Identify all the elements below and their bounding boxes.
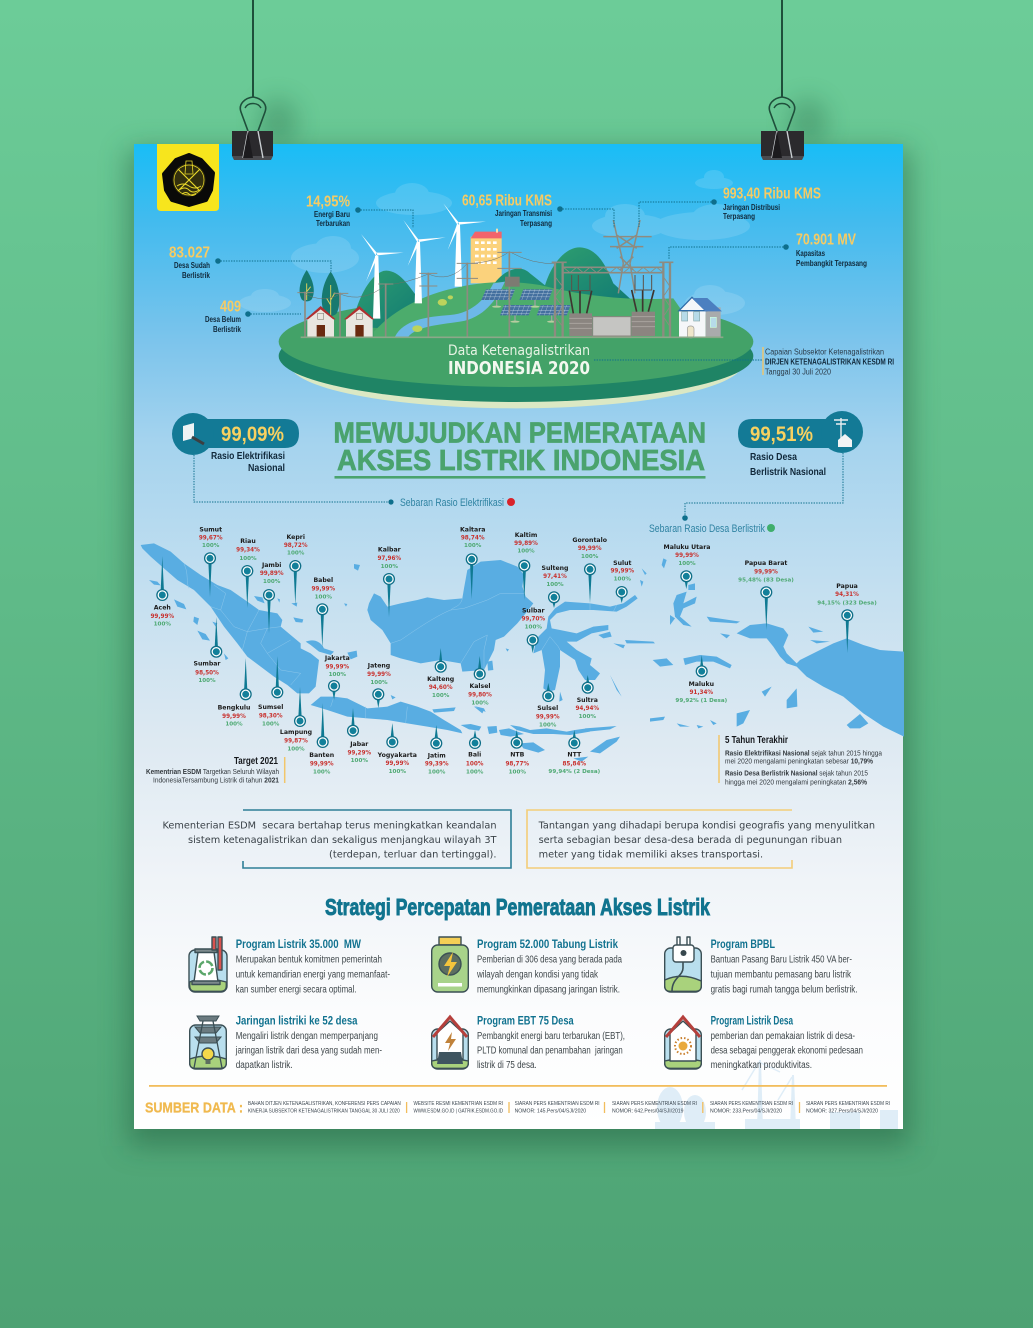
pin: Aceh: Aceh bbox=[154, 604, 171, 612]
footer: sumber data: KINERJA SUBSEKTOR KETENAGALISTRIKAN TANGGAL 30 JULI 2020 bbox=[248, 1109, 400, 1115]
Java and Madura bbox=[311, 697, 462, 733]
pin: Sumbar: 98,50% bbox=[195, 670, 219, 676]
callout: Jaringan Distribusi bbox=[639, 186, 821, 227]
solar panels bbox=[481, 289, 571, 323]
pin: Sultra bbox=[575, 675, 599, 720]
pin: Kalteng: 100% bbox=[432, 693, 450, 699]
pin: Gorontalo: 100% bbox=[581, 554, 599, 560]
pin: Kaltara: 98,74% bbox=[461, 536, 485, 542]
pin: Banten: Banten bbox=[309, 752, 334, 759]
callout: Jaringan Transmisi: 60,65 Ribu KMS bbox=[462, 192, 552, 210]
program: BPBL: Program BPBL bbox=[711, 937, 775, 951]
main title: AKSES LISTRIK INDONESIA bbox=[337, 445, 705, 477]
program: 52.000 Tabung Listrik: Program 52.000 Tabung Listrik bbox=[477, 937, 618, 951]
pin: Sumut bbox=[199, 526, 223, 597]
pin: Kaltim: Kaltim bbox=[515, 532, 537, 539]
pin: Kalsel bbox=[468, 656, 492, 706]
main title: MEWUJUDKAN PEMERATAAN bbox=[334, 418, 706, 450]
note: 5 Tahun Terakhir: Rasio Elektrifikasi Nasional sejak tahun 2015 hingga bbox=[725, 750, 882, 758]
text box: upaya Kementerian ESDM: Kementerian ESDM secara bertahap terus meningkatkan keandalan bbox=[162, 820, 496, 832]
pin: Sulteng bbox=[542, 565, 568, 608]
poster shadow bbox=[128, 150, 910, 1146]
pin: Lampung: Lampung bbox=[280, 729, 312, 736]
pin: Sumbar: 100% bbox=[198, 678, 216, 684]
binder clip left bbox=[232, 97, 273, 160]
footer: sumber data: WWW.ESDM.GO.ID | GATRIK.ESDM.GO.ID bbox=[414, 1109, 503, 1115]
pin: Bengkulu: Bengkulu bbox=[218, 704, 250, 712]
pin: Babel: 99,99% bbox=[311, 587, 335, 593]
footer: sumber data: SIARAN PERS KEMENTRIAN ESDM RI bbox=[515, 1101, 600, 1107]
pin: Sulbar: 100% bbox=[525, 625, 542, 631]
shrubs bbox=[412, 295, 453, 332]
pin: Jambi bbox=[260, 562, 284, 633]
callout: Desa Belum Berlistrik: Berlistrik bbox=[213, 324, 241, 334]
pin: Yogyakarta bbox=[377, 723, 417, 775]
pin: Lampung: 100% bbox=[287, 746, 305, 752]
pin: Jabar bbox=[347, 708, 371, 764]
callout: Kapasitas Pembangkit: 70.901 MV bbox=[796, 232, 856, 248]
icon: house with sun bbox=[665, 1017, 701, 1069]
callout: Jaringan Transmisi bbox=[462, 192, 614, 228]
pin: Sulsel: Sulsel bbox=[537, 705, 558, 712]
callout: Kapasitas Pembangkit: Pembangkit Terpasang bbox=[796, 258, 867, 268]
pin: Gorontalo: Gorontalo bbox=[572, 537, 607, 544]
pin: Papua: 94,15% (323 Desa) bbox=[817, 600, 877, 606]
section heading: strategi: Strategi Percepatan Pemerataan Akses Listrik bbox=[325, 894, 710, 920]
green meadow bbox=[374, 282, 700, 337]
program: EBT 75 Desa: Program EBT 75 Desa bbox=[477, 1014, 574, 1028]
program: Jaringan listrik ke 52 desa: Mengaliri listrik dengan memperpanjang bbox=[236, 1031, 378, 1042]
program: Listrik Desa: Program Listrik Desa bbox=[711, 1014, 793, 1028]
program: Listrik Desa: meningkatkan produktivitas. bbox=[711, 1060, 812, 1071]
callout: Desa Belum Berlistrik: 409 bbox=[220, 298, 241, 316]
main title bbox=[334, 418, 706, 479]
trees bbox=[300, 270, 339, 316]
pin: Papua Barat: Papua Barat bbox=[745, 560, 787, 567]
Maluku bbox=[653, 655, 732, 668]
pin: Jateng: 99,99% bbox=[367, 672, 391, 678]
pin: Sumbar: Sumbar bbox=[194, 660, 221, 668]
pin: NTT: 85,84% bbox=[562, 761, 586, 767]
watermark silhouette bbox=[655, 1060, 898, 1129]
pin: Aceh bbox=[150, 556, 174, 628]
stat badge: rasio desa berlistrik: Berlistrik Nasional bbox=[750, 466, 826, 478]
pin: Babel: 100% bbox=[315, 594, 332, 600]
pin: Jambi: 99,89% bbox=[260, 571, 284, 577]
note: 5 Tahun Terakhir: mei 2020 mengalami peningkatan sebesar 10,79% bbox=[725, 758, 874, 766]
pin: Bengkulu bbox=[218, 658, 251, 728]
callout: Jaringan Distribusi: 993,40 Ribu KMS bbox=[723, 186, 821, 202]
pin: Kalbar: 97,96% bbox=[377, 556, 401, 562]
building bbox=[471, 229, 502, 283]
pin: Riau: 100% bbox=[239, 556, 257, 562]
pin: Yogyakarta: Yogyakarta bbox=[377, 752, 417, 759]
pin: Jakarta bbox=[324, 655, 350, 700]
pin: Kaltim bbox=[514, 532, 538, 600]
pin: Sulbar bbox=[521, 608, 546, 653]
callout: Jaringan Transmisi: Terpasang bbox=[520, 218, 552, 228]
pin: Bali: 100% bbox=[466, 761, 484, 767]
map of Indonesia bbox=[141, 543, 904, 762]
pin: Jakarta: 100% bbox=[329, 672, 346, 678]
footer: sumber data: SUMBER DATA : bbox=[145, 1100, 243, 1116]
pin: Sultra: 94,94% bbox=[575, 706, 599, 712]
pin: Maluku: 99,92% (1 Desa) bbox=[675, 698, 728, 704]
program: BPBL bbox=[665, 937, 858, 996]
pin: Sumsel bbox=[258, 656, 283, 727]
callout: Kapasitas Pembangkit: Kapasitas bbox=[796, 248, 825, 258]
pin: Kaltara: Kaltara bbox=[460, 526, 485, 534]
program: 52.000 Tabung Listrik: memungkinkan dipasang jaringan listrik. bbox=[477, 984, 620, 996]
pin: Papua Barat: 99,99% bbox=[754, 569, 778, 575]
program: Listrik Desa: pemberian dan pemakaian listrik di desa- bbox=[711, 1031, 855, 1042]
pin: Kalteng bbox=[427, 648, 454, 699]
binder clip right bbox=[761, 97, 804, 160]
pin: Bengkulu: 100% bbox=[225, 722, 243, 728]
pin: Sultra: 100% bbox=[579, 714, 596, 720]
pin: Papua: 94,31% bbox=[835, 592, 859, 598]
pin: Yogyakarta: 99,99% bbox=[385, 761, 409, 767]
pin: Lampung: 99,87% bbox=[284, 738, 308, 744]
icon: house with lightning and solar panel bbox=[432, 1017, 468, 1069]
hanging string right bbox=[781, 0, 783, 97]
note: Target 2021: IndonesiaTersambung Listrik di tahun 2021 bbox=[153, 778, 279, 784]
pin: Kepri: 100% bbox=[287, 551, 305, 557]
program: Jaringan listrik ke 52 desa: Jaringan listriki ke 52 desa bbox=[236, 1014, 358, 1028]
pin: Jatim: 99,39% bbox=[425, 761, 449, 767]
back hills bbox=[352, 247, 633, 330]
note: 5 Tahun Terakhir bbox=[719, 735, 882, 786]
pin: Kaltim: 100% bbox=[517, 549, 535, 555]
footer: sumber data: BAHAN DITJEN KETENAGALISTRIKAN, KONFERENSI PERS CAPAIAN bbox=[248, 1101, 401, 1107]
pin: NTT: NTT bbox=[567, 752, 582, 758]
program: Listrik 35.000 MW: kan sumber energi secara optimal. bbox=[236, 984, 356, 996]
callout: Desa Sudah Berlistrik bbox=[169, 244, 331, 280]
pin: Bengkulu: 99,99% bbox=[222, 714, 246, 720]
pin: Babel: Babel bbox=[313, 577, 333, 584]
pin: Sulteng: 100% bbox=[546, 582, 564, 588]
callout: Energi Baru Terbarukan: Energi Baru bbox=[314, 209, 350, 219]
pylon bbox=[603, 220, 652, 293]
logo: ministry emblem on yellow tab bbox=[157, 144, 219, 211]
pin: Papua Barat bbox=[738, 560, 794, 630]
source note: Dirjen Ketenagalistrikan: Tanggal 30 Juli 2020 bbox=[765, 368, 831, 376]
pin: Riau: Riau bbox=[240, 538, 256, 545]
callout: Jaringan Transmisi: Jaringan Transmisi bbox=[495, 208, 552, 218]
program: EBT 75 Desa: listrik di 75 desa. bbox=[477, 1060, 537, 1071]
program: 52.000 Tabung Listrik bbox=[432, 937, 622, 996]
stat badge: rasio elektrifikasi: Rasio Elektrifikasi bbox=[211, 450, 285, 462]
pin: Yogyakarta: 100% bbox=[389, 769, 406, 775]
eastern islands bbox=[510, 558, 904, 762]
pin: Banten: 99,99% bbox=[310, 762, 334, 768]
footer: sumber data: SIARAN PERS KEMENTRIAN ESDM RI bbox=[710, 1101, 793, 1107]
pin: Sulut: Sulut bbox=[613, 560, 632, 567]
pin: NTB: 98,77% bbox=[505, 761, 529, 767]
pin: Kalbar bbox=[377, 546, 402, 617]
pin: Kalbar: 100% bbox=[381, 564, 398, 570]
island illustration: floating green platform with energy scene bbox=[279, 203, 753, 408]
pin: Sumsel: 100% bbox=[262, 721, 280, 727]
program: Jaringan listrik ke 52 desa: dapatkan listrik. bbox=[236, 1060, 293, 1071]
clip shadows bbox=[258, 98, 828, 146]
pin: NTB: 100% bbox=[509, 769, 526, 775]
icon: power plant with recycling sign bbox=[189, 937, 227, 992]
Maluku Utara bbox=[673, 583, 697, 627]
pin: Sulut bbox=[610, 560, 634, 603]
program: 52.000 Tabung Listrik: Pemberian di 306 desa yang berada pada bbox=[477, 954, 622, 966]
program: BPBL: tujuan membantu pemasang baru listrik bbox=[711, 970, 852, 980]
pin: Banten bbox=[309, 703, 334, 776]
note: Target 2021: Kementrian ESDM Targetkan Seluruh Wilayah bbox=[146, 769, 279, 776]
western islands bbox=[141, 543, 533, 737]
pin: NTB: NTB bbox=[510, 752, 525, 758]
note: 5 Tahun Terakhir: hingga mei 2020 mengalami peningkatan 2,56% bbox=[725, 780, 868, 786]
pin: Sulsel: 100% bbox=[539, 722, 557, 728]
callout: Energi Baru Terbarukan: Terbarukan bbox=[316, 218, 350, 228]
pin: Aceh: 99,99% bbox=[150, 614, 174, 620]
connector: sebaran rasio elektrifikasi bbox=[194, 455, 515, 509]
pin: Kalteng: 94,60% bbox=[429, 685, 453, 691]
pin: Bali: 100% bbox=[466, 769, 484, 775]
pin: Papua: Papua bbox=[836, 583, 858, 590]
pin: Jabar: 100% bbox=[351, 758, 368, 764]
pin: Maluku Utara: 100% bbox=[678, 561, 696, 567]
note: Target 2021: Target 2021 bbox=[234, 756, 278, 767]
pin: Sumut: Sumut bbox=[199, 526, 222, 534]
pin: Kepri: Kepri bbox=[286, 534, 305, 541]
pin: Jateng bbox=[367, 662, 391, 708]
connector: sebaran rasio desa berlistrik: Sebaran Rasio Desa Berlistrik bbox=[649, 523, 765, 535]
pin: Sumbar bbox=[194, 617, 222, 684]
pin: Riau bbox=[236, 538, 260, 608]
footer: sumber data: NOMOR: 233.Pers/04/SJI/2020 bbox=[710, 1109, 782, 1115]
stat badge: rasio elektrifikasi: 99,09% bbox=[221, 423, 284, 446]
icon: wall socket and plug bbox=[183, 423, 204, 444]
icon: electric plug bbox=[665, 937, 701, 992]
pin: Gorontalo bbox=[572, 537, 607, 603]
footer: sumber data: NOMOR: 327.Pers/04/SJI/2020 bbox=[806, 1109, 878, 1115]
pin: Papua bbox=[817, 583, 877, 653]
pin: NTT: 99,94% (2 Desa) bbox=[548, 769, 601, 775]
text box: tantangan: Tantangan yang dihadapi berupa kondisi geografis yang menyulitkan bbox=[538, 820, 875, 832]
pin: Jambi: Jambi bbox=[261, 562, 281, 569]
pin: Maluku: 91,34% bbox=[689, 690, 713, 696]
pin: Bali bbox=[466, 730, 484, 775]
pin: Sulsel: 99,99% bbox=[536, 714, 560, 720]
footer: sumber data: NOMOR: 145.Pers/04/SJI/2020 bbox=[515, 1109, 586, 1115]
program: Listrik Desa bbox=[665, 1014, 863, 1071]
pin: Maluku Utara: Maluku Utara bbox=[664, 544, 710, 551]
pin: Kalteng: Kalteng bbox=[427, 676, 454, 683]
pin: Sumut: 100% bbox=[202, 543, 220, 549]
pin: Riau: 99,34% bbox=[236, 548, 260, 554]
callout: Desa Sudah Berlistrik: Desa Sudah bbox=[174, 260, 210, 270]
pin: Kalbar: Kalbar bbox=[378, 546, 402, 554]
stat badge: rasio desa berlistrik: Rasio Desa bbox=[750, 451, 797, 463]
pin: Jabar: 99,29% bbox=[347, 750, 371, 756]
note: Target 2021 bbox=[146, 756, 285, 784]
island caption: INDONESIA 2020 bbox=[448, 358, 590, 379]
pin: Kalsel: 99,80% bbox=[468, 692, 492, 698]
footer: sumber data: NOMOR: 642.Pers/04/SJI/2019 bbox=[612, 1109, 684, 1115]
program: EBT 75 Desa bbox=[432, 1014, 625, 1071]
connector: sebaran rasio desa berlistrik bbox=[649, 453, 843, 535]
pin: Banten: 100% bbox=[313, 770, 331, 776]
text box: tantangan bbox=[527, 810, 875, 868]
text box: upaya Kementerian ESDM: sistem ketenagalistrikan dan sekaligus menjangkau wilayah 3T bbox=[188, 835, 497, 846]
pin: NTT bbox=[548, 730, 601, 775]
callout: Desa Sudah Berlistrik: Berlistrik bbox=[182, 270, 210, 280]
program: EBT 75 Desa: Pembangkit energi baru terbarukan (EBT), bbox=[477, 1031, 625, 1042]
pin: Jateng: 100% bbox=[370, 680, 388, 686]
footer: sumber data bbox=[145, 1085, 890, 1116]
pin: Kepri: 98,72% bbox=[284, 543, 308, 549]
callout: Desa Sudah Berlistrik: 83.027 bbox=[169, 244, 210, 262]
island platform bbox=[279, 296, 753, 408]
poster panel bbox=[134, 144, 903, 1129]
callout: Desa Belum Berlistrik bbox=[205, 298, 301, 334]
program: Listrik 35.000 MW: Merupakan bentuk komitmen pemerintah bbox=[236, 954, 382, 966]
river bbox=[395, 282, 505, 337]
pin: Sulteng: Sulteng bbox=[542, 565, 568, 572]
footer: sumber data: SIARAN PERS KEMENTRIAN ESDM RI bbox=[612, 1101, 697, 1107]
pin: Sumsel: 98,30% bbox=[259, 713, 283, 719]
text box: upaya Kementerian ESDM: (terdepan, terluar dan tertinggal). bbox=[329, 850, 496, 860]
clouds bbox=[239, 170, 750, 315]
pin: Jambi: 100% bbox=[263, 579, 281, 585]
Papua bbox=[737, 623, 904, 737]
text box: tantangan: meter yang tidak memiliki akses transportasi. bbox=[539, 850, 763, 860]
callout: Jaringan Distribusi: Jaringan Distribusi bbox=[723, 202, 780, 212]
pin: Bali: Bali bbox=[468, 752, 481, 758]
pin: Lampung bbox=[280, 687, 312, 752]
pin: Jateng: Jateng bbox=[367, 662, 390, 670]
pin: Sulteng: 97,41% bbox=[543, 574, 567, 580]
pin: Maluku Utara bbox=[664, 544, 710, 589]
pin: Maluku Utara: 99,99% bbox=[675, 553, 699, 559]
hanging string left bbox=[252, 0, 254, 97]
callout: Energi Baru Terbarukan bbox=[306, 194, 413, 228]
callout: Kapasitas Pembangkit bbox=[669, 232, 867, 268]
pin: Sulut: 100% bbox=[614, 577, 631, 583]
pin: Kaltara bbox=[460, 526, 485, 599]
program: Listrik Desa: desa sebagai penggerak ekonomi pedesaan bbox=[711, 1046, 863, 1056]
source note: Dirjen Ketenagalistrikan: DIRJEN KETENAGALISTRIKAN KESDM RI bbox=[765, 358, 894, 366]
pin: Sulsel bbox=[536, 683, 560, 728]
program: BPBL: gratis bagi rumah tangga belum berlistrik. bbox=[711, 984, 858, 996]
island caption bbox=[448, 343, 590, 379]
callout: Desa Belum Berlistrik: Desa Belum bbox=[205, 314, 241, 324]
program: 52.000 Tabung Listrik: wilayah dengan kondisi yang tidak bbox=[476, 970, 599, 980]
Sulawesi bbox=[533, 595, 638, 692]
pin: Sumsel: Sumsel bbox=[258, 704, 283, 711]
pin: NTB bbox=[505, 730, 529, 775]
icon: pylon with light bulb bbox=[190, 1016, 226, 1069]
pin: Maluku bbox=[675, 655, 728, 704]
island caption: Data Ketenagalistrikan bbox=[448, 343, 590, 359]
Sumatra small islands bbox=[149, 564, 360, 660]
pin: Babel bbox=[311, 577, 335, 648]
pin: Jatim: Jatim bbox=[427, 752, 446, 760]
pin: Maluku: Maluku bbox=[689, 681, 714, 688]
pin: Sumut: 99,67% bbox=[199, 536, 223, 542]
icon: pylon and house bbox=[834, 418, 852, 447]
callout: Energi Baru Terbarukan: 14,95% bbox=[306, 194, 350, 210]
program: EBT 75 Desa: PLTD komunal dan penambahan jaringan bbox=[477, 1046, 623, 1056]
pin: Kalsel: 100% bbox=[471, 700, 489, 706]
power lines bbox=[297, 252, 557, 337]
Kalimantan bbox=[367, 560, 533, 672]
program: Listrik 35.000 MW: untuk kemandirian energi yang memanfaat- bbox=[236, 970, 390, 980]
note: 5 Tahun Terakhir: Rasio Desa Berlistrik Nasional sejak tahun 2015 bbox=[725, 770, 868, 778]
stat badge: rasio elektrifikasi: Nasional bbox=[248, 462, 285, 474]
pin: Kaltara: 100% bbox=[464, 543, 482, 549]
houses bbox=[305, 306, 374, 337]
program: Jaringan listrik ke 52 desa: jaringan listrik dari desa yang sudah men- bbox=[235, 1046, 382, 1056]
wind turbines bbox=[361, 203, 486, 319]
pin: Kaltim: 99,89% bbox=[514, 541, 538, 547]
pin: Papua Barat: 95,48% (83 Desa) bbox=[738, 577, 794, 583]
program: Listrik 35.000 MW: Program Listrik 35.000 MW bbox=[236, 937, 362, 951]
note: 5 Tahun Terakhir: 5 Tahun Terakhir bbox=[725, 735, 788, 746]
Nusa Tenggara bbox=[510, 725, 620, 762]
solar house bbox=[679, 297, 722, 338]
program: Listrik 35.000 MW bbox=[189, 937, 390, 996]
pin: Jabar: Jabar bbox=[349, 741, 369, 748]
pin: Jakarta: 99,99% bbox=[325, 664, 349, 670]
pin: Kepri bbox=[284, 534, 308, 605]
footer: sumber data: SIARAN PERS KEMENTRIAN ESDM RI bbox=[806, 1101, 890, 1107]
pin: Aceh: 100% bbox=[154, 622, 171, 628]
ground line bbox=[301, 335, 723, 340]
text box: tantangan: serta sebagian besar desa-desa berada di pegunungan ribuan bbox=[539, 835, 842, 846]
stat badge: rasio elektrifikasi bbox=[172, 413, 299, 474]
pin: Jakarta: Jakarta bbox=[324, 655, 350, 662]
icon: battery with lightning bbox=[432, 937, 468, 992]
footer: sumber data: WEBSITE RESMI KEMENTRIAN ESDM RI bbox=[414, 1101, 503, 1107]
transformers bbox=[569, 275, 655, 336]
source note: Dirjen Ketenagalistrikan: Capaian Subsektor Ketenagalistrikan bbox=[765, 348, 884, 356]
pin: Sulbar: Sulbar bbox=[522, 608, 546, 614]
program: BPBL: Bantuan Pasang Baru Listrik 450 VA ber- bbox=[711, 954, 852, 966]
source note: Dirjen Ketenagalistrikan bbox=[594, 347, 894, 376]
stat badge: rasio desa berlistrik bbox=[738, 411, 863, 478]
pin: Sulut: 99,99% bbox=[610, 569, 634, 575]
stat badge: rasio desa berlistrik: 99,51% bbox=[750, 423, 813, 446]
pin: Jatim bbox=[425, 725, 449, 775]
pin: Jatim: 100% bbox=[428, 769, 446, 775]
pin: Gorontalo: 99,99% bbox=[578, 546, 602, 552]
text box: upaya Kementerian ESDM bbox=[162, 810, 511, 868]
connector: sebaran rasio elektrifikasi: Sebaran Rasio Elektrifikasi bbox=[400, 497, 504, 509]
pin: Sultra: Sultra bbox=[577, 697, 598, 704]
program: Jaringan listrik ke 52 desa bbox=[190, 1014, 382, 1071]
substation gantry bbox=[552, 262, 673, 337]
pin: Kalsel: Kalsel bbox=[469, 683, 491, 690]
pin: Sulbar: 99,70% bbox=[521, 617, 545, 623]
Sumatra bbox=[141, 543, 319, 693]
callout: Jaringan Distribusi: Terpasang bbox=[723, 211, 755, 221]
